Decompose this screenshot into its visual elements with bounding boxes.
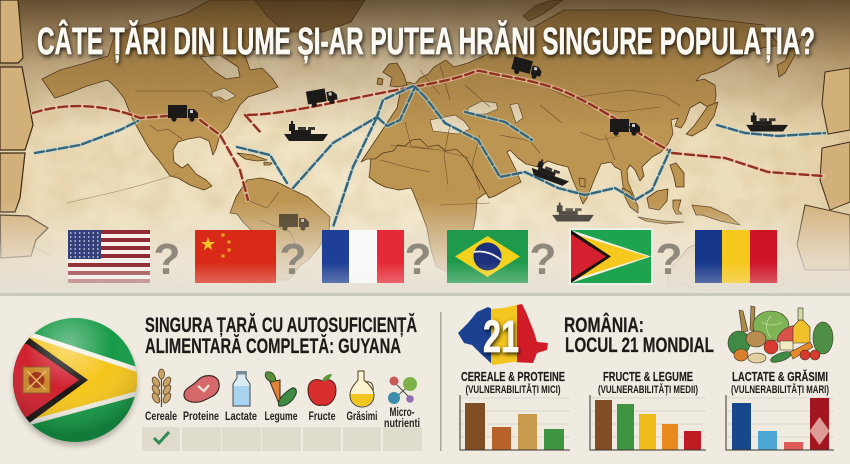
ocean crease bbox=[20, 52, 560, 255]
chart heading: (VULNERABILITĂȚI MICI) bbox=[466, 383, 561, 396]
category labels: Grăsimi bbox=[346, 411, 378, 423]
chart: cereale and proteine bbox=[460, 369, 570, 450]
question mark: ? bbox=[530, 235, 556, 284]
category labels: Lactate bbox=[225, 411, 257, 423]
question mark: ? bbox=[405, 235, 431, 284]
left rock edge bbox=[0, 0, 48, 258]
transport icons bbox=[168, 56, 788, 231]
food illustration bbox=[728, 306, 833, 365]
category labels: nutrienți bbox=[384, 418, 420, 430]
chart: fructe and legume bbox=[590, 369, 706, 450]
category labels: Fructe bbox=[308, 411, 336, 423]
bars bbox=[732, 398, 830, 450]
icon: check mark bbox=[154, 432, 169, 443]
inland seas and lakes bbox=[212, 88, 523, 134]
country borders bbox=[135, 65, 680, 254]
flag wash bbox=[68, 262, 777, 283]
panel: Romania bbox=[455, 300, 834, 450]
icon: wheat bbox=[151, 369, 172, 407]
food category icons bbox=[151, 369, 417, 407]
bars bbox=[465, 403, 564, 450]
Romania heading: LOCUL 21 MONDIAL bbox=[565, 334, 714, 357]
continents bbox=[42, 0, 801, 290]
flag: Brazil bbox=[447, 230, 528, 283]
right rock edge bbox=[797, 68, 850, 270]
category labels: Proteine bbox=[183, 411, 219, 423]
chart heading bbox=[461, 369, 565, 396]
flag: Romania bbox=[695, 230, 777, 283]
Romania map with rank bbox=[458, 304, 548, 365]
Romania heading: ROMÂNIA: bbox=[564, 313, 644, 337]
chart heading: FRUCTE & LEGUME bbox=[603, 369, 693, 384]
question mark: ? bbox=[154, 235, 180, 284]
Romania map with rank: 21 bbox=[483, 311, 519, 362]
chart heading bbox=[598, 369, 698, 396]
panel: Guyana bbox=[10, 314, 422, 451]
icon: apple bbox=[308, 374, 336, 405]
blue sea routes bbox=[35, 86, 825, 227]
flag: France bbox=[322, 230, 404, 283]
icon: vegetables bbox=[265, 372, 296, 406]
flag: Guyana bbox=[569, 228, 653, 285]
heading: ALIMENTARĂ COMPLETĂ: GUYANA bbox=[145, 335, 401, 358]
round Guyana flag bbox=[10, 318, 137, 446]
checklist cells bbox=[142, 427, 422, 451]
icon: milk bottle bbox=[233, 371, 250, 406]
category labels: Legume bbox=[264, 411, 298, 423]
flag: USA bbox=[68, 230, 150, 283]
red land routes bbox=[33, 71, 823, 200]
flag: China bbox=[195, 230, 276, 283]
chart heading bbox=[731, 369, 829, 396]
question mark: ? bbox=[280, 235, 306, 284]
question mark: ? bbox=[656, 235, 682, 284]
icon: meat bbox=[184, 376, 219, 402]
Romania heading bbox=[564, 313, 714, 357]
bottom panel bbox=[0, 293, 850, 464]
world map background bbox=[0, 0, 850, 296]
divider bbox=[440, 312, 442, 451]
icon: oil bottle bbox=[350, 371, 374, 407]
chart: lactate and grasimi bbox=[726, 369, 834, 450]
dark vignette bbox=[0, 0, 850, 130]
bars bbox=[595, 400, 701, 450]
icon: micronutrients bbox=[388, 376, 417, 404]
flags row bbox=[68, 228, 777, 285]
category labels: Cereale bbox=[145, 411, 177, 423]
trade routes bbox=[33, 71, 825, 227]
bottom fade bbox=[0, 200, 850, 296]
heading bbox=[145, 314, 417, 358]
category labels bbox=[145, 407, 420, 430]
category labels: Micro- bbox=[390, 407, 415, 419]
parchment texture bbox=[0, 0, 850, 296]
heading: SINGURA ȚARĂ CU AUTOSUFICIENȚĂ bbox=[145, 314, 417, 337]
chart heading: CEREALE & PROTEINE bbox=[461, 369, 565, 384]
chart heading: (VULNERABILITĂȚI MEDII) bbox=[598, 383, 698, 396]
